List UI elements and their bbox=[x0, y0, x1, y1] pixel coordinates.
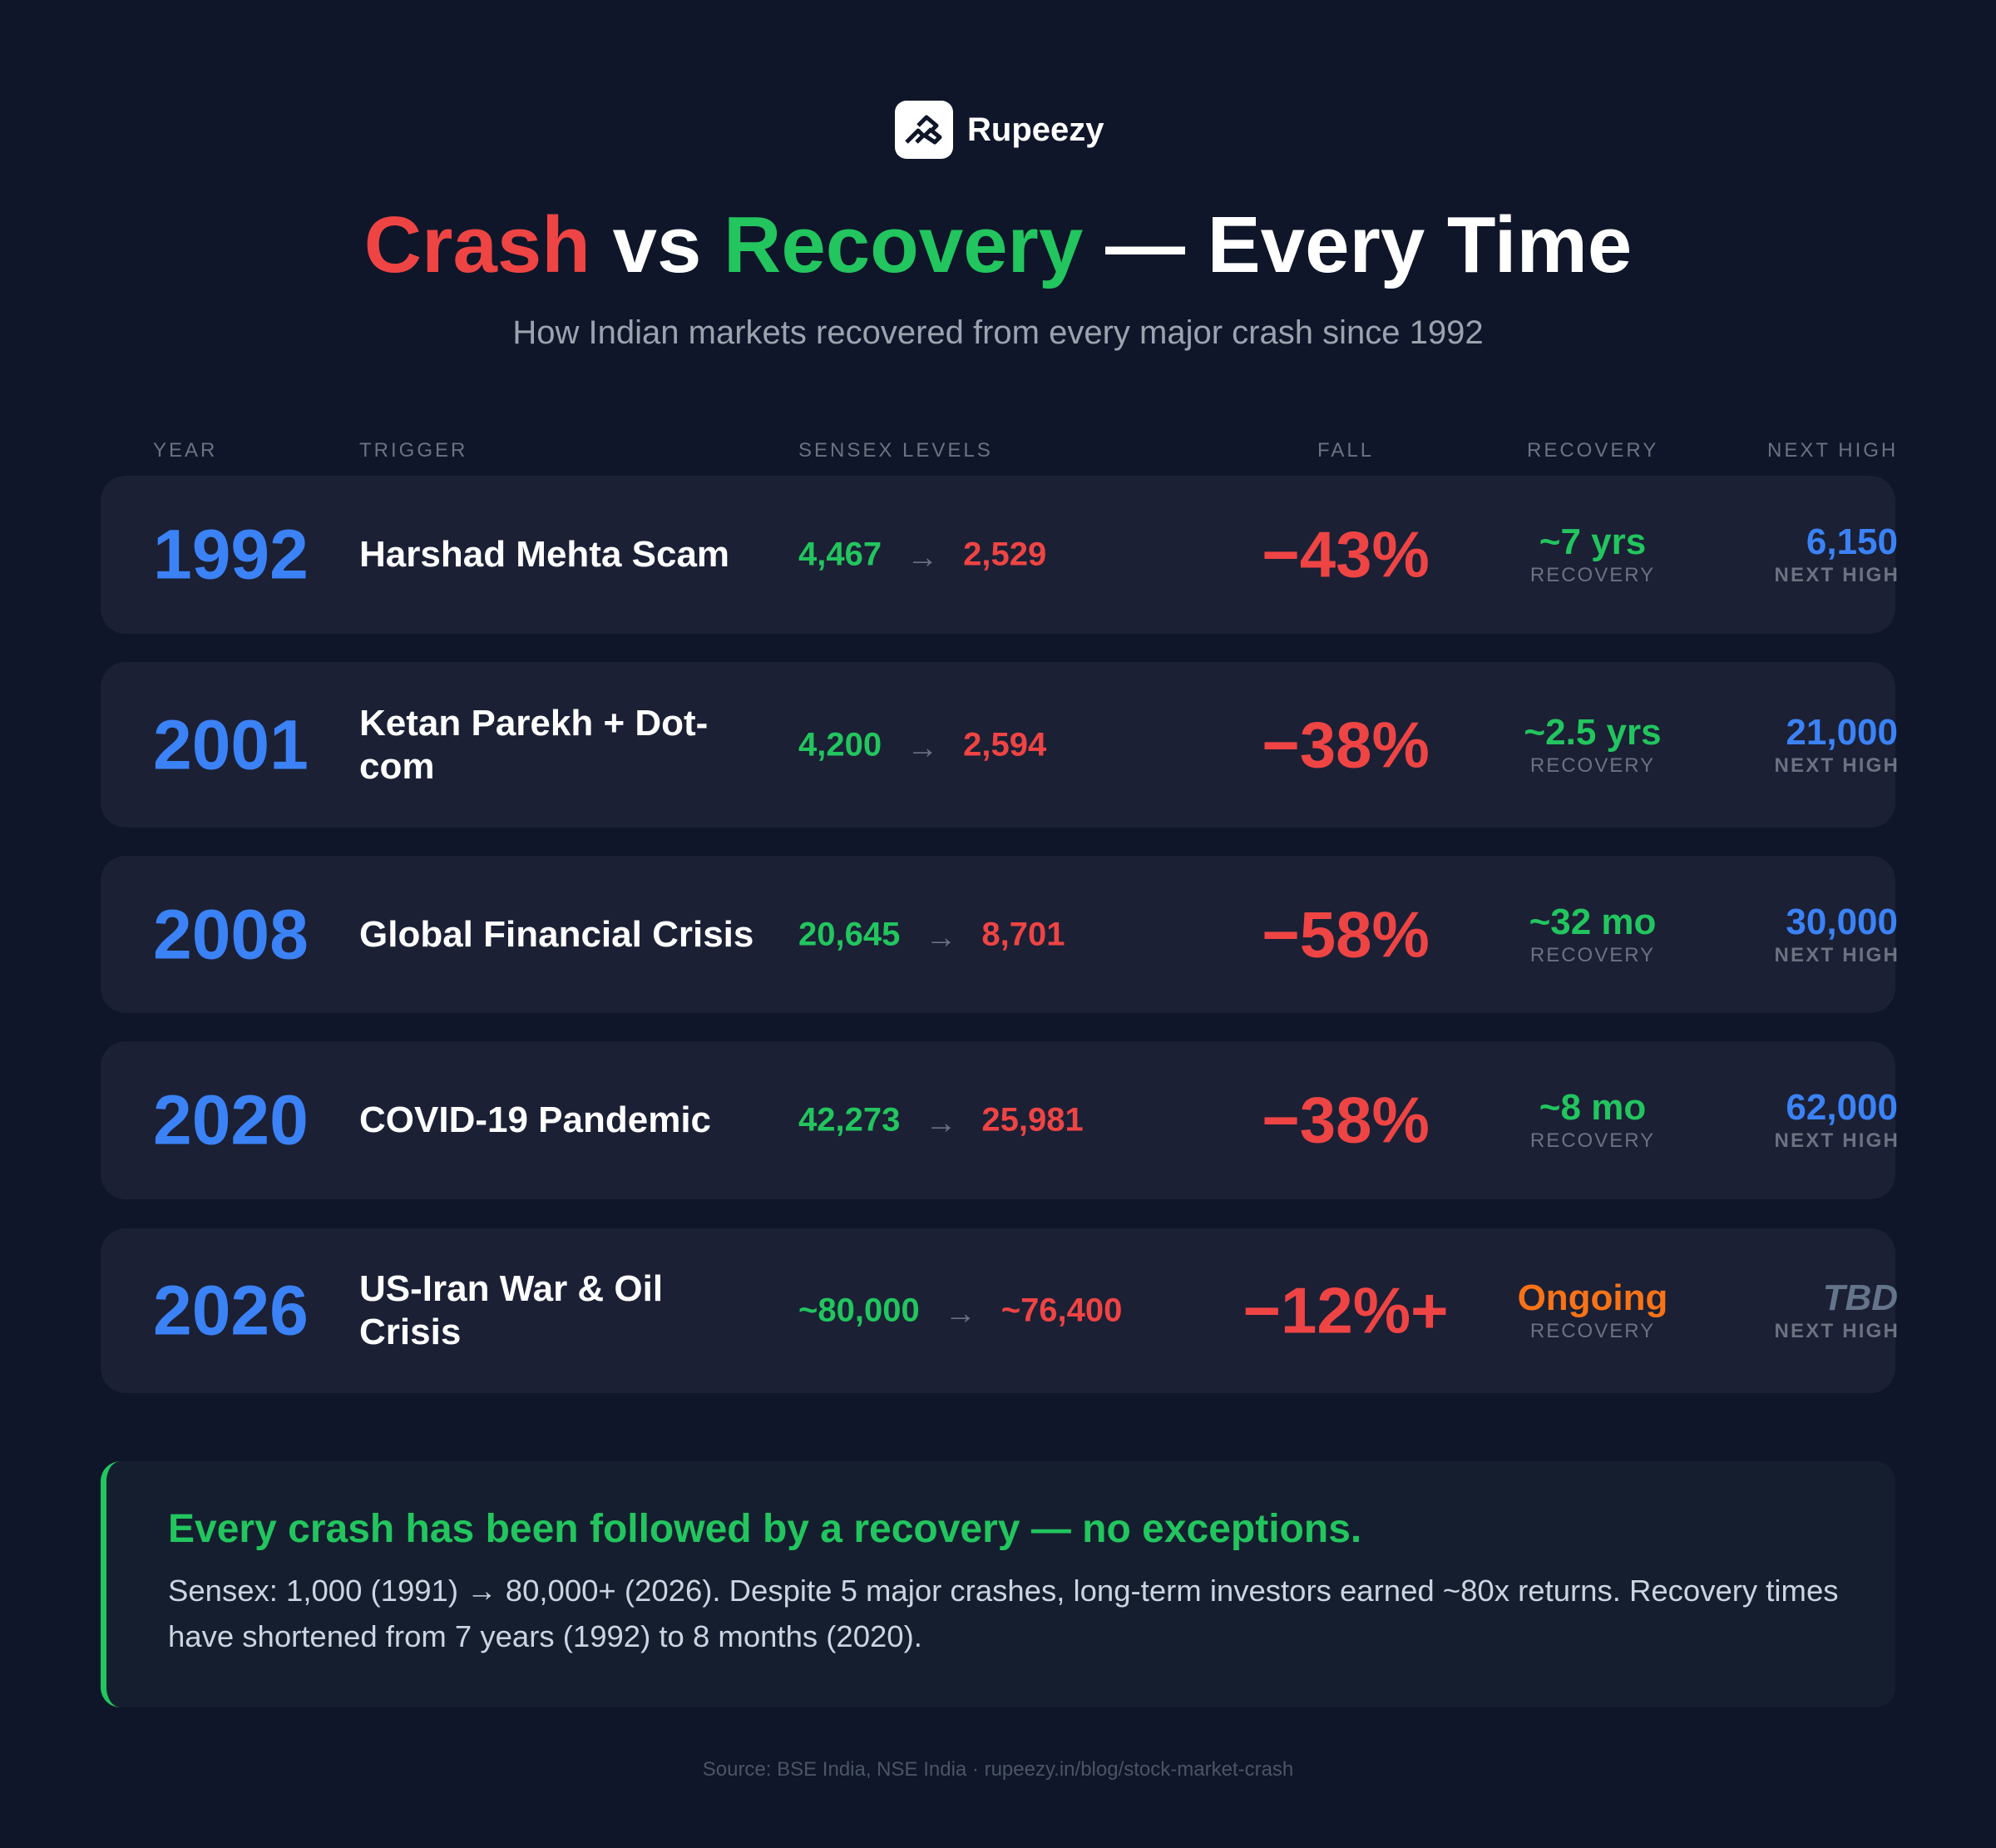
row: 2001: ~2.5 yrs bbox=[1524, 712, 1662, 752]
column headers: YEAR bbox=[153, 439, 217, 462]
row: 1992: 6,150 bbox=[1806, 521, 1898, 562]
row: 2008: RECOVERY bbox=[1530, 943, 1655, 966]
row: 2020: ~8 mo bbox=[1539, 1087, 1646, 1128]
row: 1992: 2,529 bbox=[963, 536, 1046, 572]
row: 2001: Ketan Parekh + Dot-com bbox=[359, 702, 708, 787]
row: 2020: RECOVERY bbox=[1530, 1129, 1655, 1152]
row: 2020: 25,981 bbox=[981, 1101, 1084, 1138]
row: 2001: RECOVERY bbox=[1530, 754, 1655, 777]
subtitle: How Indian markets recovered from every major crash since 1992 bbox=[512, 314, 1484, 351]
row: 2020: 2020 bbox=[153, 1081, 309, 1159]
row: 2020: → bbox=[925, 1106, 956, 1141]
footer source: Source: BSE India, NSE India · rupeezy.in/blog/stock-market-crash bbox=[703, 1758, 1293, 1781]
row: 1992: 4,467 bbox=[798, 536, 882, 572]
row: 1992: NEXT HIGH bbox=[1775, 564, 1900, 586]
row: 2020: 42,273 bbox=[798, 1101, 900, 1138]
logo bbox=[895, 101, 1104, 159]
row: 1992 bbox=[101, 476, 1895, 634]
row: 2001: 2,594 bbox=[963, 726, 1046, 763]
row: 2008: −58% bbox=[1262, 897, 1430, 971]
callout: takeaway bbox=[101, 1461, 1895, 1707]
row: 2020: 62,000 bbox=[1786, 1087, 1898, 1128]
row: 2020: −38% bbox=[1262, 1083, 1430, 1156]
row: 2026: → bbox=[945, 1296, 976, 1331]
row: 2020: COVID-19 Pandemic bbox=[359, 1099, 711, 1140]
row: 2026: NEXT HIGH bbox=[1775, 1320, 1900, 1342]
row: 1992: 1992 bbox=[153, 516, 309, 594]
row: 2008: 20,645 bbox=[798, 916, 900, 952]
row: 2001: → bbox=[907, 730, 938, 765]
row: 1992: −43% bbox=[1262, 517, 1430, 590]
row: 2001: 2001 bbox=[153, 705, 309, 783]
row: 2008: 8,701 bbox=[981, 916, 1065, 952]
row: 2001: −38% bbox=[1262, 708, 1430, 781]
row: 2008: 2008 bbox=[153, 895, 309, 973]
row: 1992: ~7 yrs bbox=[1539, 521, 1646, 562]
icon: rupeezy mark bbox=[895, 101, 953, 159]
column headers: NEXT HIGH bbox=[1767, 439, 1898, 462]
row: 2008: → bbox=[925, 920, 956, 955]
brand name: Rupeezy bbox=[967, 111, 1104, 148]
row: 2008: 30,000 bbox=[1786, 902, 1898, 941]
row: 2001: 4,200 bbox=[798, 726, 882, 763]
row: 1992: RECOVERY bbox=[1530, 564, 1655, 586]
row: 2026 bbox=[101, 1228, 1895, 1393]
row: 2026: TBD bbox=[1823, 1277, 1898, 1318]
row: 2026: Ongoing bbox=[1518, 1277, 1667, 1318]
row: 1992: → bbox=[907, 541, 938, 576]
row: 2001: 21,000 bbox=[1786, 712, 1898, 752]
callout body: Sensex: 1,000 (1991) → 80,000+ (2026). Despite 5 major crashes, long-term investors earned ~80x returns. Recovery times have shortened from 7 years (1992) to 8 months (2020). bbox=[168, 1574, 1838, 1653]
row: 1992: Harshad Mehta Scam bbox=[359, 534, 729, 575]
row: 2008: Global Financial Crisis bbox=[359, 913, 753, 955]
row: 2026: −12%+ bbox=[1243, 1274, 1449, 1347]
row: 2008: NEXT HIGH bbox=[1775, 943, 1900, 966]
row: 2001: NEXT HIGH bbox=[1775, 754, 1900, 777]
row: 2026: ~80,000 bbox=[798, 1292, 920, 1329]
row: 2008: ~32 mo bbox=[1529, 902, 1656, 941]
column headers: SENSEX LEVELS bbox=[798, 439, 993, 462]
column headers bbox=[153, 439, 1898, 462]
row: 2026: 2026 bbox=[153, 1271, 309, 1349]
row: 2008 bbox=[101, 856, 1895, 1013]
row: 2020: NEXT HIGH bbox=[1775, 1129, 1900, 1152]
row: 2001 bbox=[101, 662, 1895, 828]
row: 2026: RECOVERY bbox=[1530, 1320, 1655, 1342]
callout heading: Every crash has been followed by a recovery — no exceptions. bbox=[168, 1507, 1361, 1551]
row: 2026: ~76,400 bbox=[1001, 1292, 1122, 1329]
row: 2020 bbox=[101, 1041, 1895, 1199]
column headers: TRIGGER bbox=[359, 439, 467, 462]
column headers: FALL bbox=[1317, 439, 1374, 462]
column headers: RECOVERY bbox=[1527, 439, 1658, 462]
title: Crash vs Recovery — Every Time bbox=[364, 200, 1632, 289]
row: 2026: US-Iran War & Oil Crisis bbox=[359, 1268, 663, 1352]
